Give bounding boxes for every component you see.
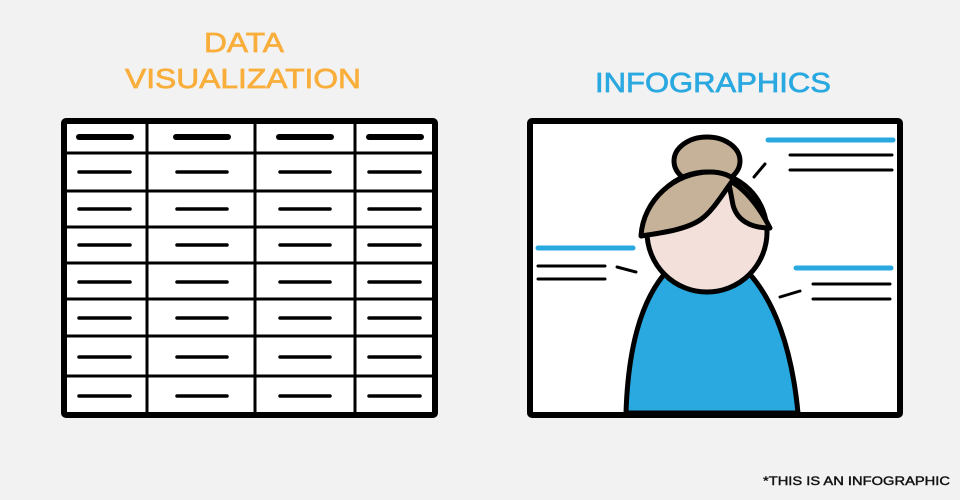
title: data visualization: VISUALIZATION [125, 63, 361, 94]
title: data visualization [125, 27, 361, 94]
table chart [64, 121, 435, 415]
infographic panel [530, 121, 900, 415]
footnote: *THIS IS AN INFOGRAPHIC [763, 474, 950, 488]
callouts [538, 140, 893, 299]
face [647, 172, 767, 292]
bun [674, 137, 740, 185]
title: infographics: INFOGRAPHICS [595, 67, 831, 98]
body [626, 270, 798, 413]
person illustration [626, 137, 798, 413]
hair left piece [641, 172, 733, 236]
hair right strand [728, 180, 770, 228]
title: data visualization: DATA [204, 27, 284, 58]
